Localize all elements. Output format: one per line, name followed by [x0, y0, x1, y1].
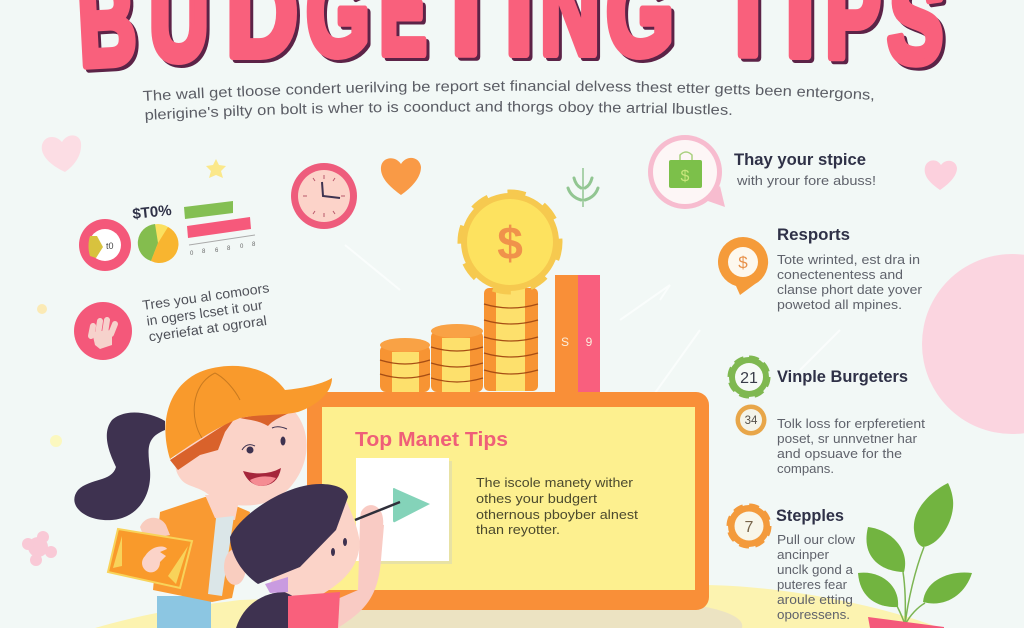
chart: bars: 8	[202, 249, 206, 255]
body text: The iscole manety wither	[476, 475, 634, 490]
text block: simple budgeters: Tolk loss for erpferetient	[777, 416, 925, 431]
folder	[108, 529, 192, 588]
chart: pie	[138, 224, 179, 263]
text block: stepples	[776, 506, 856, 622]
ground	[95, 585, 940, 628]
badge: 34	[736, 404, 766, 436]
jacket	[153, 497, 250, 602]
icon: star	[206, 159, 226, 178]
pants	[157, 596, 211, 628]
text block: simple budgeters: poset, sr unnvetner har	[777, 431, 918, 446]
bars: 9	[586, 335, 593, 349]
white card	[356, 458, 452, 564]
dot	[50, 435, 62, 447]
icon: shopping bag bubble	[648, 135, 725, 209]
icon: light pink heart	[42, 135, 81, 172]
tongue	[250, 476, 276, 486]
text block: stepples: aroule etting	[777, 592, 853, 607]
pot	[868, 617, 944, 628]
icon: clock	[291, 163, 357, 229]
text block: simple budgeters	[777, 367, 925, 476]
badge: 21: 21	[740, 370, 758, 387]
eyes	[331, 548, 335, 556]
text: first tip: with yrour fore abuss!	[736, 173, 876, 188]
icon: dollar badge: $	[738, 253, 748, 272]
badge: 7: 7	[745, 519, 754, 536]
collar	[265, 577, 288, 593]
icon: dollar badge	[718, 237, 768, 295]
coin stacks	[380, 288, 538, 392]
text block: reports: Tote wrinted, est dra in	[777, 252, 920, 267]
intro text: plerigine's pilty on bolt is wher to is coonduct and thorgs oboy the artrial lbustles.	[146, 101, 732, 123]
text block: left note	[141, 280, 275, 345]
bars: S	[561, 335, 569, 349]
cap seams	[194, 373, 240, 438]
chart: bars: 8	[252, 242, 256, 248]
text block: reports: conectenentess and	[777, 267, 903, 282]
chart: donut	[79, 219, 131, 271]
chart label: $T0%	[132, 202, 172, 223]
illustration: plant	[858, 483, 972, 628]
icon: pink flower	[22, 531, 57, 566]
arm	[335, 520, 384, 628]
hand	[360, 505, 383, 538]
body text: than reyotter.	[476, 522, 560, 537]
intro text: The wall get tloose condert uerilving be report set financial delvess thest etter getts been entergons,	[142, 80, 874, 102]
hair	[170, 408, 298, 470]
lower hair	[236, 592, 292, 628]
illustration: boy with cap	[74, 366, 332, 628]
text block: stepples: Pull our clow	[777, 532, 856, 547]
icon: shopping bag bubble: $	[681, 168, 690, 185]
body text	[476, 475, 638, 537]
text block: stepples: unclk gond a	[777, 562, 854, 577]
chart: bars	[184, 201, 256, 257]
stack 3	[484, 288, 538, 391]
text block: reports: powetod all mpines.	[777, 297, 902, 312]
illustration: girl	[230, 484, 400, 628]
face	[270, 498, 360, 597]
left arm	[140, 518, 170, 540]
pencil	[355, 502, 400, 520]
ponytail	[74, 413, 165, 520]
badge: 7	[728, 505, 770, 547]
icon: orange heart	[381, 158, 421, 195]
text block: simple budgeters: and opsuave for the	[777, 446, 902, 461]
text block: stepples: puteres fear	[777, 577, 848, 592]
text block: stepples: ancinper	[777, 547, 830, 562]
hair	[230, 484, 348, 584]
dot	[37, 304, 47, 314]
stack 1	[380, 338, 430, 392]
neck	[205, 495, 240, 520]
body text: othernous pboyber alnest	[476, 507, 638, 522]
pink circle	[922, 254, 1024, 434]
eyes	[242, 427, 287, 454]
icon: green sprig	[568, 168, 598, 207]
shirt	[288, 592, 340, 628]
heading: Top Manet Tips	[355, 429, 508, 451]
big coin: $	[497, 217, 523, 269]
big coin	[461, 193, 559, 291]
cap	[165, 366, 332, 459]
panel: top money tips	[307, 392, 709, 610]
chart: bars: 8	[227, 246, 231, 252]
stack 2	[431, 324, 483, 392]
chart: bars: 0	[240, 244, 244, 250]
shirt	[208, 516, 234, 596]
text block: simple budgeters: Vinple Burgeters	[777, 367, 908, 386]
text block: left note: Tres you al comoors	[141, 280, 270, 313]
body text: othes your budgert	[476, 491, 597, 506]
text block: stepples: oporessens.	[777, 607, 850, 622]
intro text	[142, 80, 874, 123]
hand	[224, 549, 246, 585]
head	[175, 410, 307, 506]
icon: heart right	[925, 160, 957, 190]
text block: reports	[777, 225, 923, 312]
text block: left note: in ogers lcset it our	[146, 297, 264, 329]
mouth	[243, 468, 281, 486]
bars	[555, 275, 600, 393]
title	[74, 0, 951, 96]
text block: stepples: Stepples	[776, 506, 844, 525]
text block: left note: cyeriefat at ogroral	[148, 313, 268, 344]
text block: simple budgeters: compans.	[777, 461, 834, 476]
chart: bars: 0	[190, 251, 194, 257]
heading: first tip: Thay your stpice	[734, 150, 866, 169]
text block: reports: clanse phort date yover	[777, 282, 923, 297]
text block: reports: Resports	[777, 225, 850, 244]
badge: 34: 34	[745, 415, 758, 427]
chart: bars: 6	[215, 248, 219, 254]
chart: donut: t0	[106, 241, 114, 251]
badge: 21	[729, 357, 769, 397]
icon: hand	[74, 302, 132, 360]
